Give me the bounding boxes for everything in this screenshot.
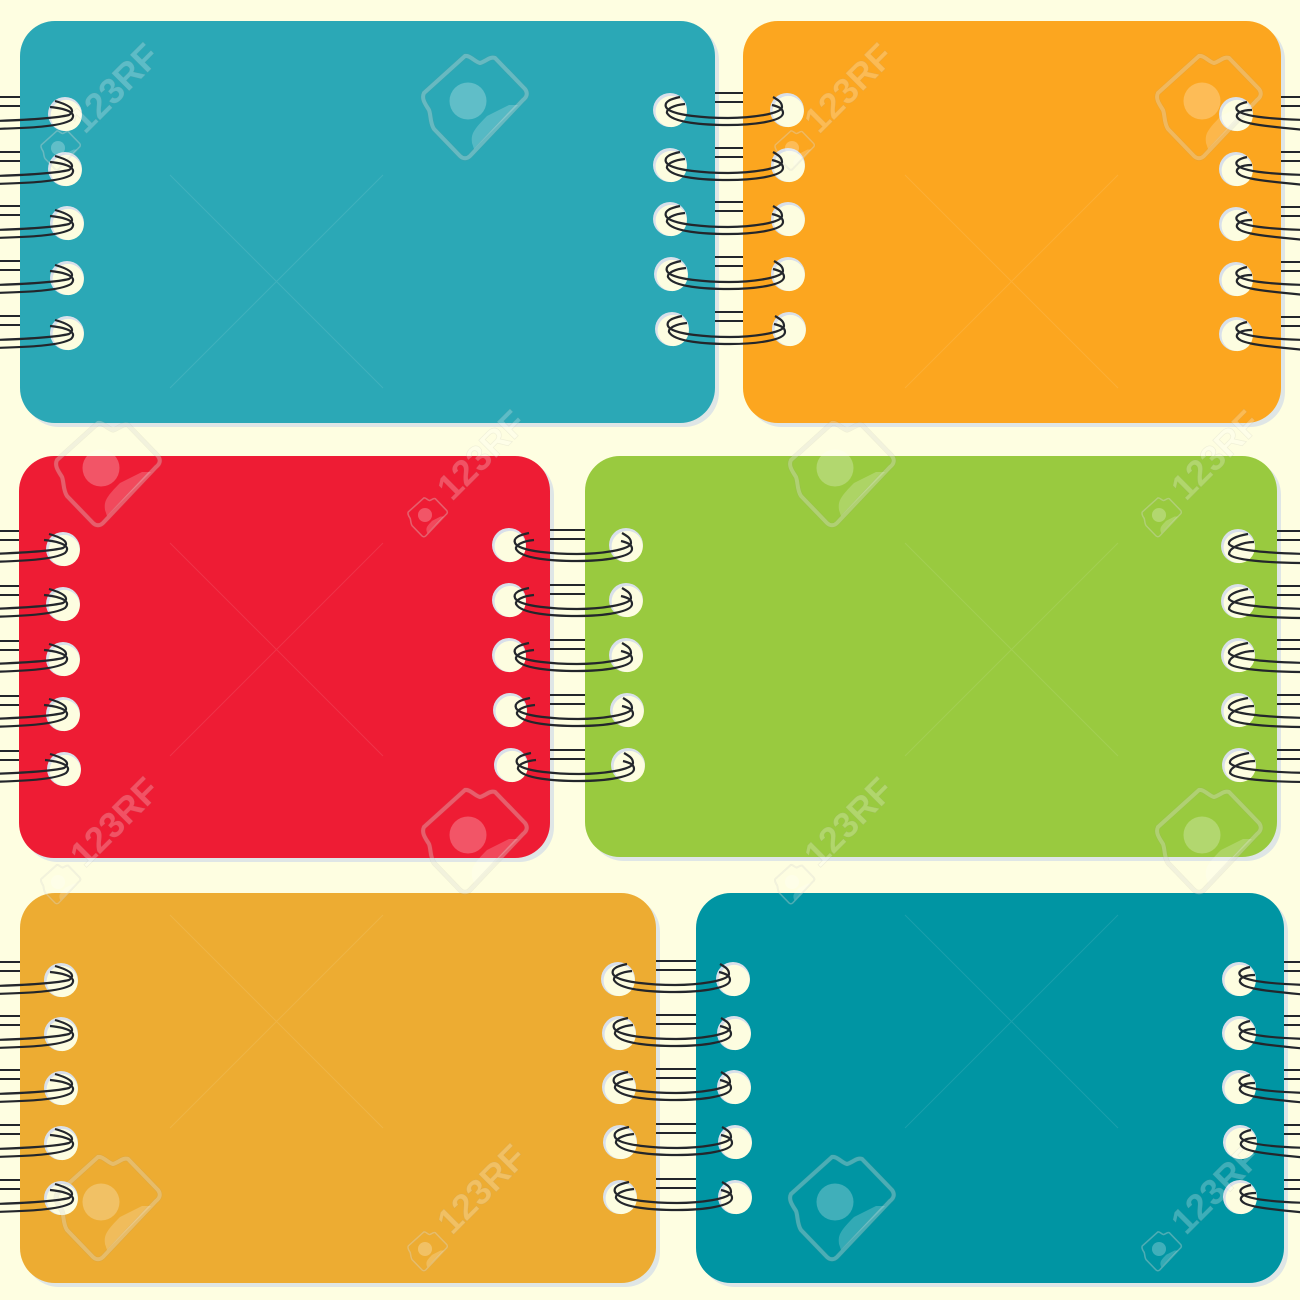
card: red middle left — [19, 456, 550, 858]
watermark 123RF text: 123RF — [796, 769, 901, 875]
watermark 123RF text: 123RF — [62, 769, 167, 875]
watermark 123RF text: 123RF — [1163, 402, 1268, 508]
watermark 123RF text: 123RF — [429, 402, 534, 508]
watermark 123RF text: 123RF — [796, 35, 901, 141]
card: orange top right — [743, 21, 1281, 423]
card: dark teal bottom right — [696, 893, 1284, 1283]
card: amber bottom left — [20, 893, 656, 1283]
card: teal top left — [20, 21, 715, 423]
card: green middle right — [585, 456, 1277, 857]
spiral binding: bottom row — [0, 964, 1300, 1213]
spiral binding: middle row — [0, 533, 1300, 782]
watermark 123RF text: 123RF — [1163, 1136, 1268, 1242]
watermark 123RF text: 123RF — [62, 35, 167, 141]
spiral binding: top row — [0, 97, 1300, 350]
watermark 123RF text: 123RF — [429, 1136, 534, 1242]
watermark small logos — [41, 131, 1181, 1271]
